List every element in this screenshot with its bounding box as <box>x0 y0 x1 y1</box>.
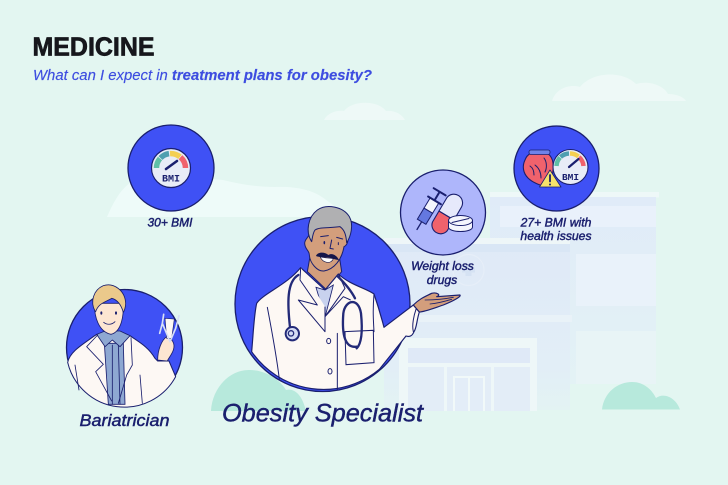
doctor coat seams <box>267 294 416 390</box>
doctor face <box>305 221 348 271</box>
eyes and smile <box>100 311 117 315</box>
subtitle: What can I expect in treatment plans for obesity? <box>33 68 372 84</box>
icon: heart <box>523 150 553 187</box>
doctor lapels <box>298 268 351 332</box>
label: 30+ BMI <box>147 216 193 230</box>
lapels <box>75 335 142 403</box>
collar <box>97 331 130 347</box>
icon: syringe <box>411 188 446 233</box>
cloud: upper right <box>552 75 686 101</box>
bush: right <box>602 382 680 410</box>
doctor moustache <box>316 253 339 260</box>
circle <box>66 290 182 406</box>
doctor pocket <box>345 330 374 365</box>
shirt and tie <box>104 343 125 404</box>
label line two: health issues <box>520 229 592 243</box>
measuring calipers <box>160 314 179 342</box>
doctor buttons <box>327 338 332 374</box>
doctor smile <box>320 257 333 262</box>
panel: obesity specialist <box>222 207 460 428</box>
smile <box>104 322 115 324</box>
label: 27+ BMI with <box>520 216 592 230</box>
panel: 27+ BMI with health issues <box>514 126 599 243</box>
label: Weight loss <box>411 259 474 273</box>
circle <box>514 126 599 211</box>
title: MEDICINE <box>32 32 154 62</box>
cloud: left <box>107 178 346 217</box>
circle <box>235 216 410 392</box>
doctor coat <box>252 268 419 389</box>
icon: BMI gauge: BMI <box>562 172 579 183</box>
hand <box>158 337 174 361</box>
doctor hair <box>308 207 352 243</box>
building: cross sign <box>453 254 484 286</box>
hair <box>93 285 126 312</box>
circle <box>400 170 486 255</box>
building: left wing <box>384 238 572 410</box>
hospital building <box>384 192 659 411</box>
circle <box>128 125 214 211</box>
panel: 30+ BMI <box>128 125 214 230</box>
cloud: upper centre <box>324 103 405 120</box>
label: Bariatrician <box>80 412 170 430</box>
icon: capsule <box>432 194 463 234</box>
figure: doctor <box>252 207 460 390</box>
face <box>94 303 123 334</box>
building: entrance <box>399 338 537 411</box>
label: Obesity Specialist <box>222 400 424 428</box>
panel: bariatrician <box>66 285 182 430</box>
icon: warning triangle <box>540 170 561 187</box>
doctor shirt <box>316 285 333 317</box>
doctor fingers <box>425 297 453 304</box>
doctor hand <box>413 293 460 312</box>
doctor eyes and brows <box>321 236 343 249</box>
doctor neck <box>307 250 342 290</box>
coat <box>68 334 176 407</box>
bush: left <box>211 370 306 411</box>
doctor eye <box>323 241 325 244</box>
icon: BMI gauge: BMI <box>162 174 180 186</box>
tie line <box>112 345 120 404</box>
figure: bariatrician <box>68 285 179 407</box>
panel: weight loss drugs <box>400 170 486 287</box>
stethoscope <box>286 275 362 348</box>
building: right wing <box>490 192 659 384</box>
label line two: drugs <box>427 273 457 287</box>
icon: tablet <box>448 216 472 232</box>
